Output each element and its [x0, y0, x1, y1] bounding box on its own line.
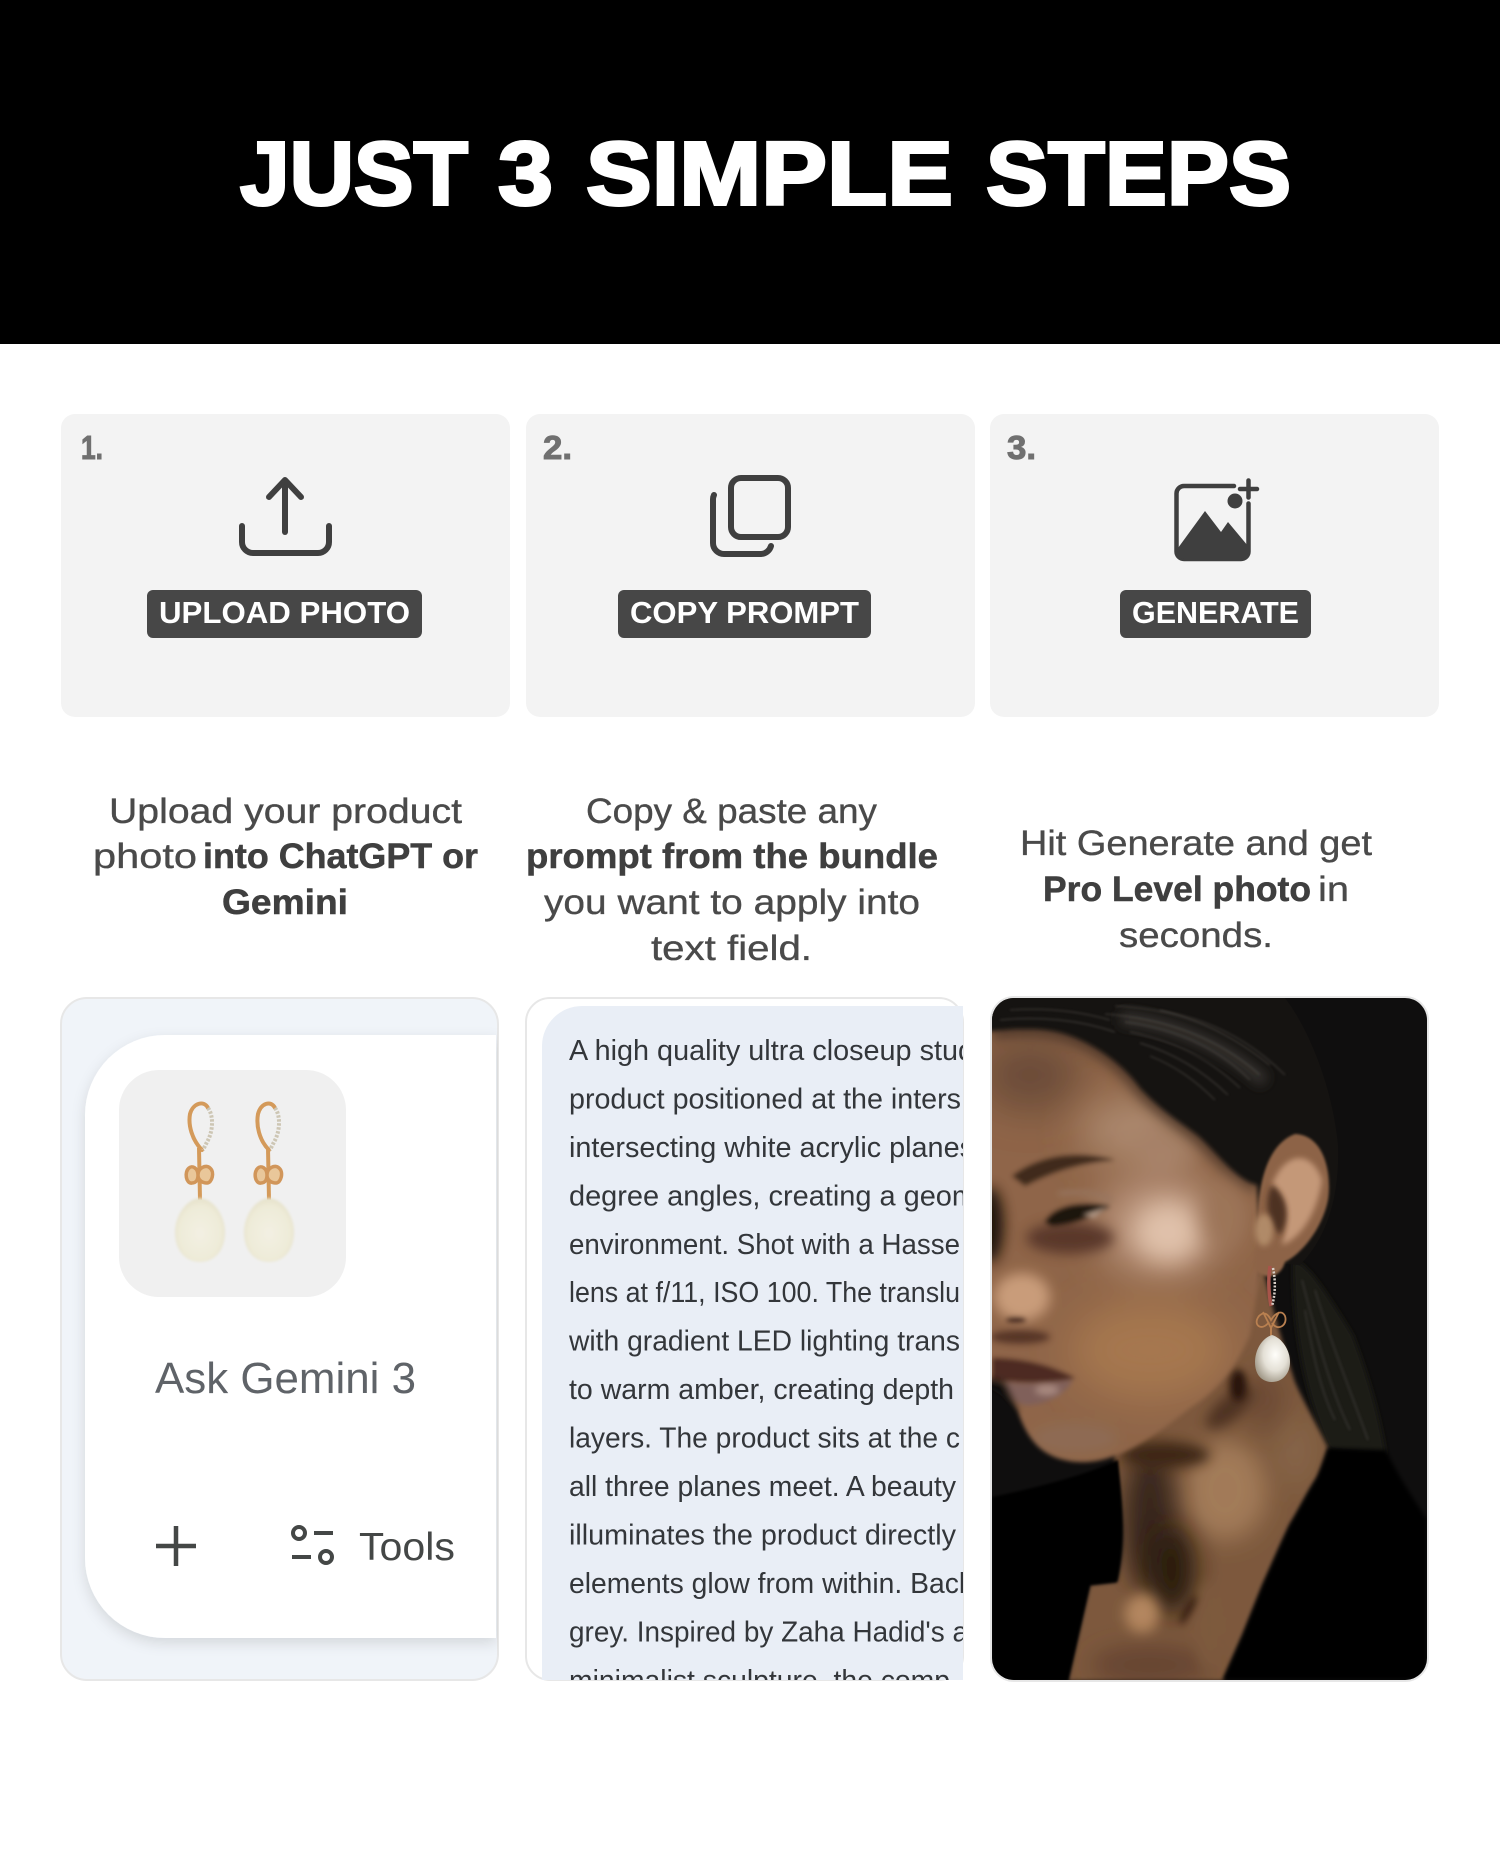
prompt text: layers. The product sits at the c: [569, 1423, 960, 1455]
text block: step 3 description: in: [1318, 870, 1349, 909]
label: generate: [1120, 590, 1311, 638]
step number 2: 2.: [543, 429, 572, 466]
forehead tone: [980, 1039, 1080, 1111]
earring hoop and logo: [1257, 1266, 1286, 1336]
hair sheen: [1000, 1006, 1285, 1100]
title: [240, 124, 1291, 224]
label: copy prompt: COPY PROMPT: [630, 595, 859, 630]
prompt text: degree angles, creating a geom: [569, 1180, 976, 1212]
prompt text: to warm amber, creating depth: [569, 1374, 954, 1406]
tools label: Tools: [359, 1526, 455, 1569]
prompt text: lens at f/11, ISO 100. The translu: [569, 1277, 960, 1309]
thumbnail: pearl earrings: [119, 1070, 346, 1297]
label: upload photo: UPLOAD PHOTO: [159, 595, 410, 630]
text block: step 3 description: [1020, 824, 1372, 955]
right earring: [244, 1103, 294, 1262]
prompt placeholder: Ask Gemini 3: [155, 1354, 416, 1403]
label: upload photo: [147, 590, 422, 638]
lower cheek: [1070, 1300, 1230, 1400]
brow: [1012, 1155, 1115, 1186]
panel: gemini upload screenshot: [61, 998, 498, 1680]
title: STEPS: [986, 124, 1291, 224]
title: JUST: [240, 124, 468, 224]
text block: step 2 description: you want to apply into: [544, 883, 920, 922]
label: generate: GENERATE: [1132, 595, 1299, 630]
prompt text: elements glow from within. Back: [569, 1568, 973, 1600]
text block: step 2 description: text field.: [651, 929, 812, 968]
icon: copy: [713, 478, 788, 554]
dark left of chin: [985, 1378, 1018, 1412]
neck light: [1183, 1440, 1267, 1540]
nose bridge shadow: [976, 1187, 1004, 1263]
neck shadows: [1124, 1450, 1176, 1590]
left earring: [175, 1103, 225, 1262]
prompt text: with gradient LED lighting trans: [568, 1326, 960, 1358]
input box: [85, 1035, 496, 1638]
ponytail: [1293, 1262, 1386, 1455]
jacket right: [1223, 1448, 1427, 1680]
text block: step 3 description: Hit Generate and get: [1020, 824, 1372, 863]
text block: step 2 description: [526, 792, 938, 968]
prompt text: [568, 1035, 976, 1697]
icon: plus: [156, 1526, 196, 1566]
step number 3: 3.: [1007, 429, 1036, 466]
ear: [1253, 1134, 1329, 1276]
hairline fuzz: [992, 1029, 1257, 1185]
title: 3: [498, 124, 553, 224]
cheek highlight: [1098, 1173, 1222, 1277]
face: [992, 1026, 1260, 1466]
text block: step 3 description: Pro Level photo: [1043, 870, 1311, 909]
panel: step 2 card: [526, 414, 975, 717]
text block: step 3 description: seconds.: [1119, 916, 1273, 955]
chin: [1044, 1426, 1110, 1446]
nose: [994, 1273, 1050, 1321]
title: SIMPLE: [586, 124, 953, 224]
text block: step 1 description: photo: [93, 837, 197, 876]
lips: [992, 1358, 1075, 1383]
icon: generate image: [1176, 480, 1257, 559]
text block: step 1 description: Gemini: [222, 883, 348, 922]
prompt text: A high quality ultra closeup stud: [569, 1035, 974, 1067]
header band: [0, 0, 1500, 344]
icon: tools sliders: [292, 1527, 333, 1563]
neck: [1068, 1272, 1330, 1680]
prompt text: all three planes meet. A beauty: [569, 1471, 956, 1503]
text block: step 2 description: Copy & paste any: [586, 792, 878, 831]
step number 1: 1.: [81, 429, 103, 466]
panel: step 3 card: [990, 414, 1439, 717]
text block: step 1 description: into ChatGPT or: [203, 837, 478, 876]
jacket left: [992, 1460, 1122, 1681]
eye: [1045, 1204, 1110, 1226]
text block: step 1 description: Upload your product: [109, 792, 462, 831]
prompt text: environment. Shot with a Hasse: [569, 1229, 960, 1261]
icon: upload: [242, 480, 329, 553]
text block: step 1 description: [93, 792, 478, 922]
prompt text: intersecting white acrylic planes: [569, 1132, 974, 1164]
panel: generated portrait photo: [976, 997, 1428, 1690]
text block: step 2 description: prompt from the bundle: [526, 837, 938, 876]
under eye shadow: [1026, 1222, 1114, 1254]
collarbone highlight: [1125, 1594, 1159, 1634]
panel: prompt text screenshot: [526, 998, 976, 1697]
earring pearl: [1255, 1335, 1290, 1382]
prompt text: grey. Inspired by Zaha Hadid's a: [569, 1616, 969, 1648]
prompt text: illuminates the product directly: [569, 1520, 956, 1552]
prompt text: product positioned at the inters: [569, 1084, 961, 1116]
prompt bubble: [542, 1006, 963, 1680]
hair: [992, 998, 1300, 1262]
panel: step 1 card: [61, 414, 510, 717]
label: copy prompt: [618, 590, 871, 638]
prompt text: minimalist sculpture, the comp: [569, 1665, 950, 1697]
